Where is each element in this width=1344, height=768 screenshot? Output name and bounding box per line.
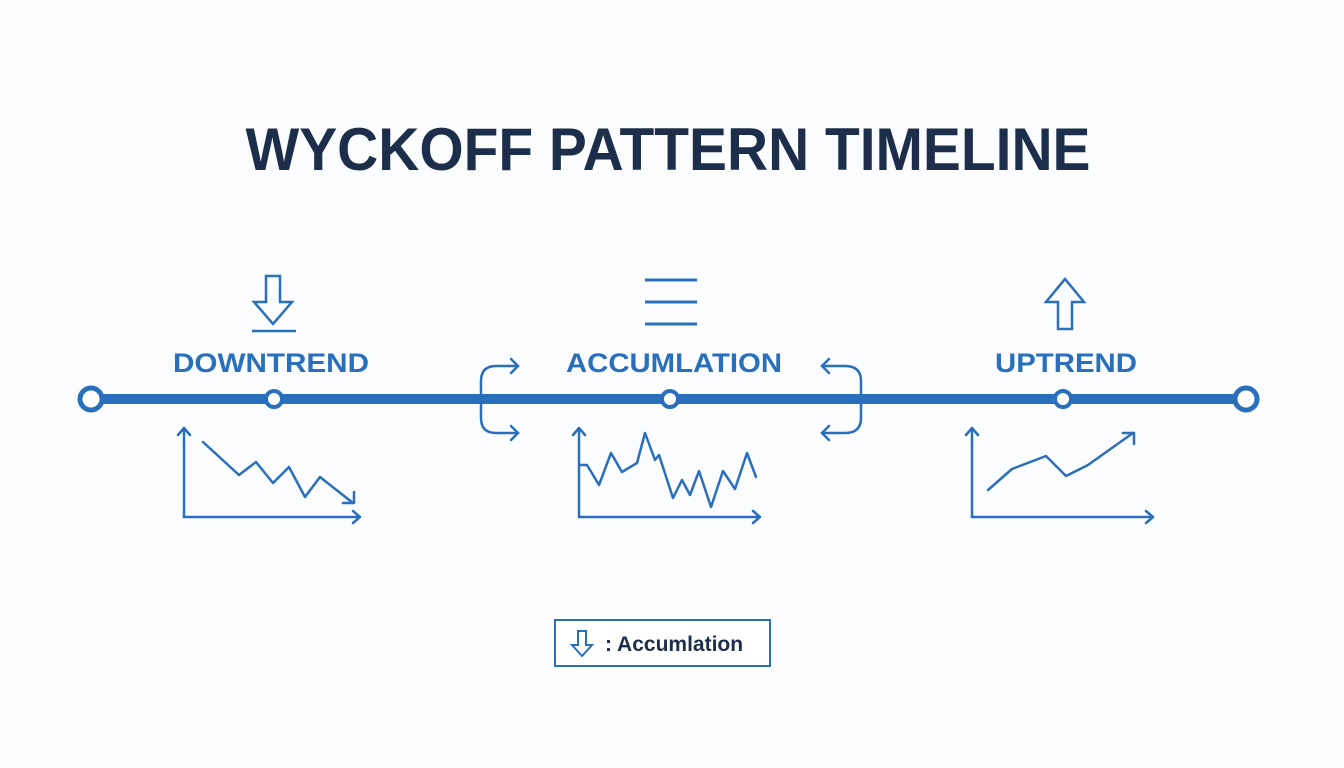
chart: accumulation: [573, 428, 760, 523]
chart: downtrend: [178, 428, 360, 523]
arrow: right bracket: [822, 359, 861, 440]
icon: up arrow: [1046, 279, 1084, 329]
timeline: [80, 388, 1257, 410]
arrow: left bracket: [481, 359, 518, 440]
title: WYCKOFF PATTERN TIMELINE: [246, 116, 1090, 183]
heading: uptrend: UPTREND: [995, 348, 1137, 378]
heading: accumulation: ACCUMLATION: [566, 348, 782, 378]
chart: uptrend: [966, 428, 1153, 523]
icon: down arrow: [252, 276, 296, 331]
heading: downtrend: DOWNTREND: [173, 348, 369, 378]
icon: three lines: [645, 280, 697, 324]
legend: [555, 620, 770, 666]
legend: : Accumlation: [605, 633, 743, 656]
